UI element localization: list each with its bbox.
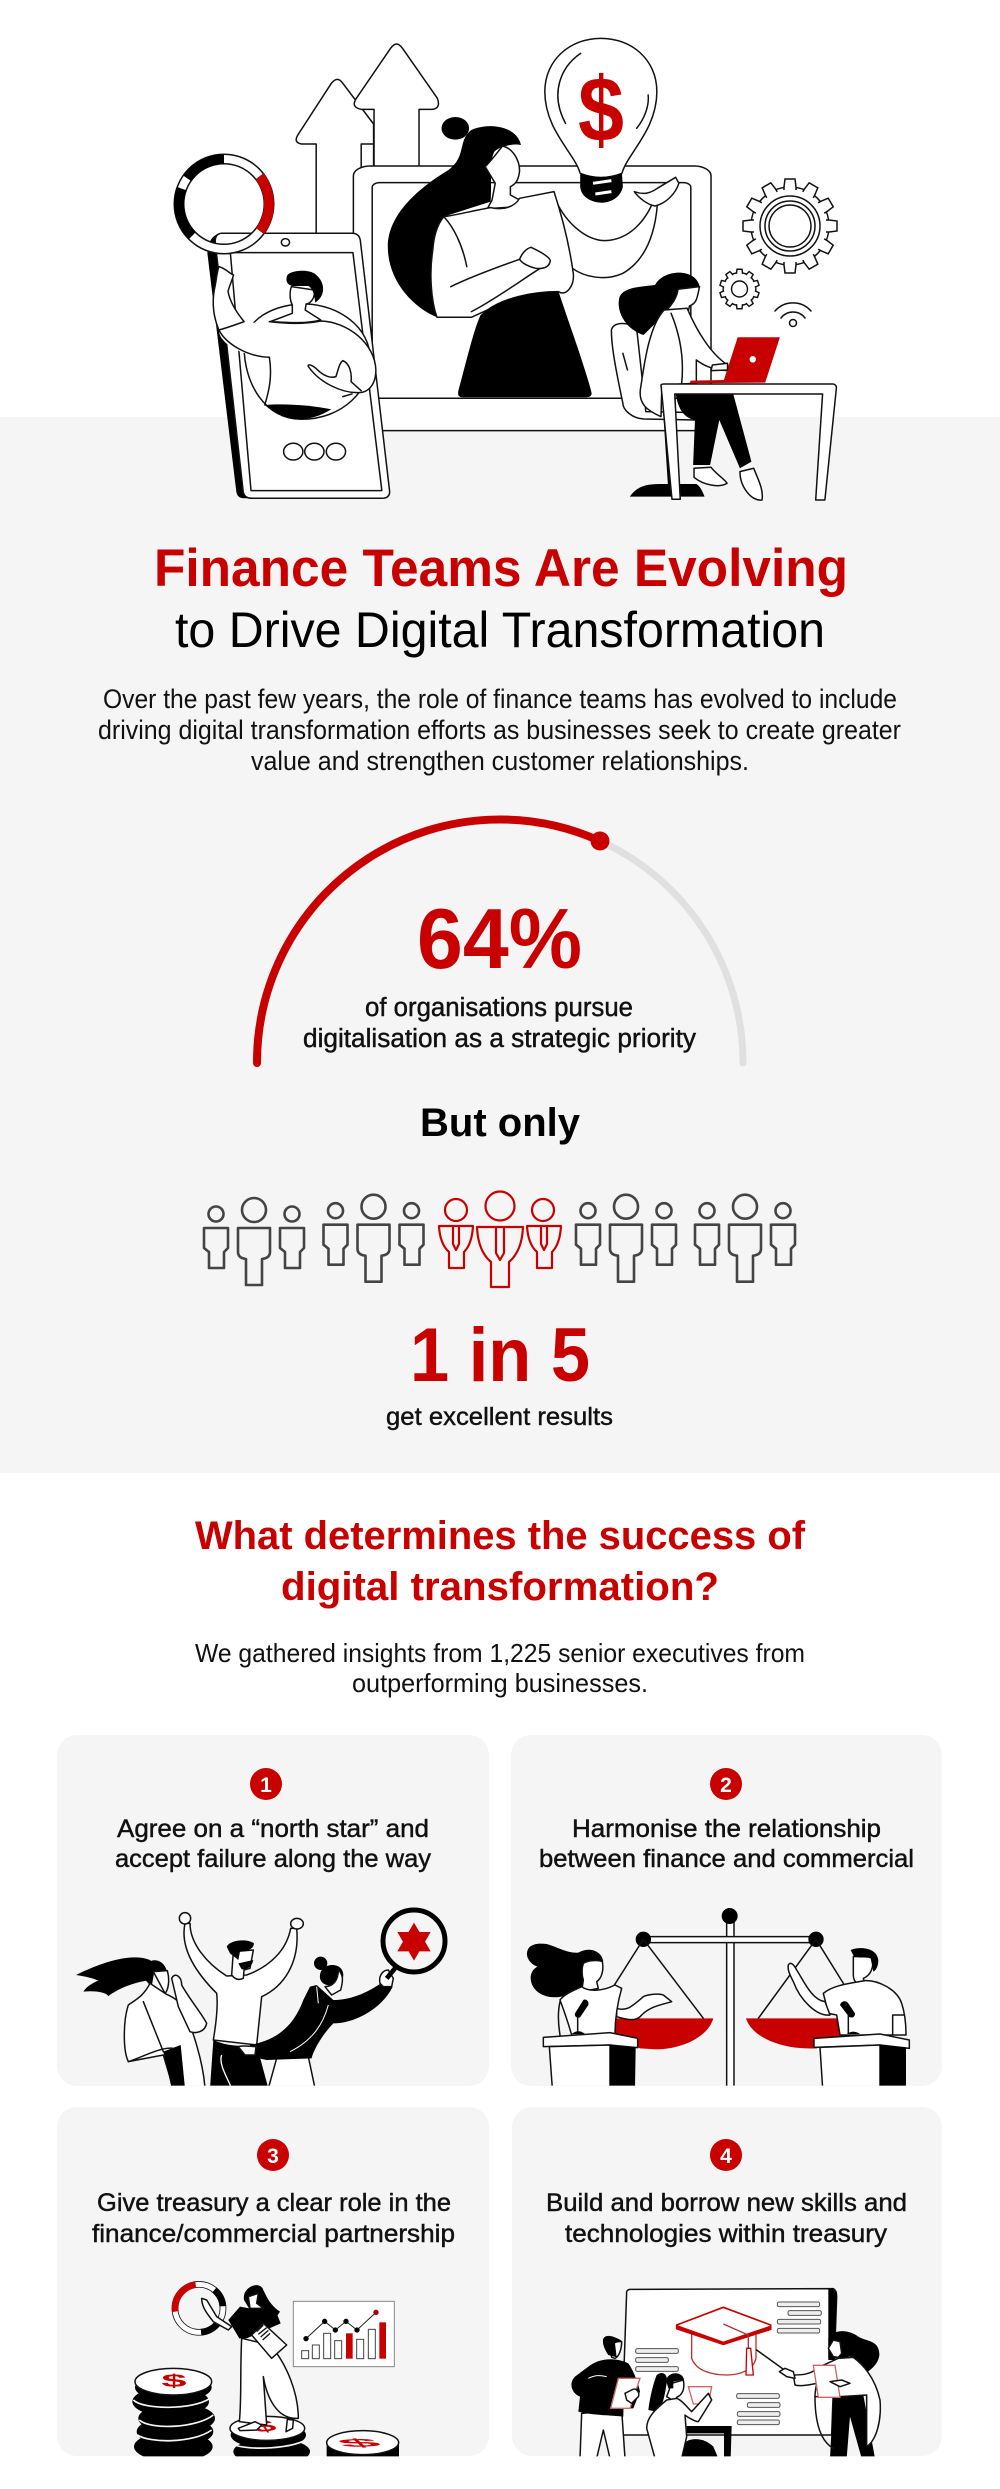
stat caption: digitalisation as a strategic priority <box>303 1025 696 1053</box>
coin stack left: $ <box>161 2371 187 2390</box>
coin stack middle <box>229 2416 310 2456</box>
illustration: three celebrating people <box>76 1910 445 2088</box>
graduation cap <box>677 2307 771 2375</box>
card 2 heading: between finance and commercial <box>539 1845 914 1873</box>
card 1 heading: Agree on a “north star” and <box>117 1815 429 1843</box>
dollar sign: $ <box>578 59 624 161</box>
illustration: graduation cap board and team <box>571 2289 880 2458</box>
card 1 heading <box>115 1815 431 1873</box>
badge 2 <box>710 1768 742 1800</box>
intro paragraph: value and strengthen customer relationships. <box>251 746 749 776</box>
card 3 heading: finance/commercial partnership <box>92 2220 455 2248</box>
standing man <box>571 2336 640 2458</box>
badge 1 <box>250 1768 282 1800</box>
wifi icon <box>775 303 811 326</box>
people icons <box>204 1192 795 1287</box>
intro paragraph <box>98 684 901 776</box>
coin right <box>327 2431 399 2458</box>
seated woman at desk <box>611 273 836 500</box>
intro paragraph: driving digital transformation efforts as businesses seek to create greater <box>98 715 901 745</box>
big stat: 64% <box>417 892 582 987</box>
stat caption: of organisations pursue <box>365 994 633 1022</box>
illustration: woman on coin stacks with chart <box>132 2284 399 2465</box>
card 3 heading <box>92 2189 455 2248</box>
card 1 heading: accept failure along the way <box>115 1845 431 1873</box>
section intro <box>195 1638 805 1698</box>
hero illustration <box>179 38 837 500</box>
panel: card 1 <box>57 1735 489 2088</box>
text lines <box>636 2302 821 2425</box>
woman <box>202 2285 298 2432</box>
card 2 heading: Harmonise the relationship <box>572 1815 881 1843</box>
monitor <box>353 166 711 431</box>
coin right: $ <box>332 2436 386 2450</box>
badge 4: 4 <box>720 2145 732 2168</box>
arrows <box>296 44 438 233</box>
data ring <box>179 159 269 249</box>
light bulb <box>545 38 657 203</box>
stat: 1 in 5: 1 in 5 <box>410 1313 590 1398</box>
badge 1: 1 <box>260 1774 272 1797</box>
grey group 1 <box>204 1198 304 1285</box>
stat caption <box>303 994 696 1053</box>
panel: card 2 <box>511 1735 942 2088</box>
badge 2: 2 <box>720 1774 732 1797</box>
small gear <box>720 269 759 309</box>
badge 3 <box>257 2139 289 2171</box>
section heading: digital transformation? <box>281 1565 719 1609</box>
presenter woman <box>388 117 679 397</box>
red group <box>439 1192 561 1287</box>
panel: grey intro background <box>0 417 1000 1473</box>
title: Finance Teams Are Evolving <box>154 539 848 598</box>
coin stack middle: $ <box>247 2416 281 2436</box>
section heading: What determines the success of <box>195 1514 806 1558</box>
seated woman <box>647 2373 732 2458</box>
panel: card 4 <box>512 2107 942 2458</box>
badge 4 <box>710 2139 742 2171</box>
section intro: We gathered insights from 1,225 senior executives from <box>195 1638 805 1668</box>
phone with man <box>207 233 390 498</box>
badge 3: 3 <box>267 2145 279 2168</box>
card 4 heading: Build and borrow new skills and <box>546 2189 907 2217</box>
data ring <box>175 2284 223 2332</box>
grey group 3 <box>576 1195 676 1282</box>
chart <box>293 2301 394 2367</box>
card 4 heading <box>546 2189 907 2248</box>
grey group 2 <box>324 1195 424 1282</box>
card 2 heading <box>539 1815 914 1873</box>
card 3 heading: Give treasury a clear role in the <box>97 2189 451 2217</box>
grey group 4 <box>695 1195 795 1282</box>
section heading <box>195 1514 806 1609</box>
presenting woman <box>779 2331 880 2458</box>
section intro: outperforming businesses. <box>352 1668 648 1698</box>
intro paragraph: Over the past few years, the role of finance teams has evolved to include <box>103 684 897 714</box>
panel: card 3 <box>57 2107 489 2465</box>
illustration: scales with two speakers <box>527 1908 909 2088</box>
title <box>154 539 848 658</box>
but only heading: But only <box>420 1101 581 1145</box>
big gear <box>743 179 837 273</box>
coin stack left <box>132 2368 215 2462</box>
title: to Drive Digital Transformation <box>175 602 825 658</box>
gauge: 64% <box>257 819 743 1063</box>
card 4 heading: technologies within treasury <box>565 2220 888 2248</box>
stat caption: get excellent results <box>386 1403 613 1431</box>
